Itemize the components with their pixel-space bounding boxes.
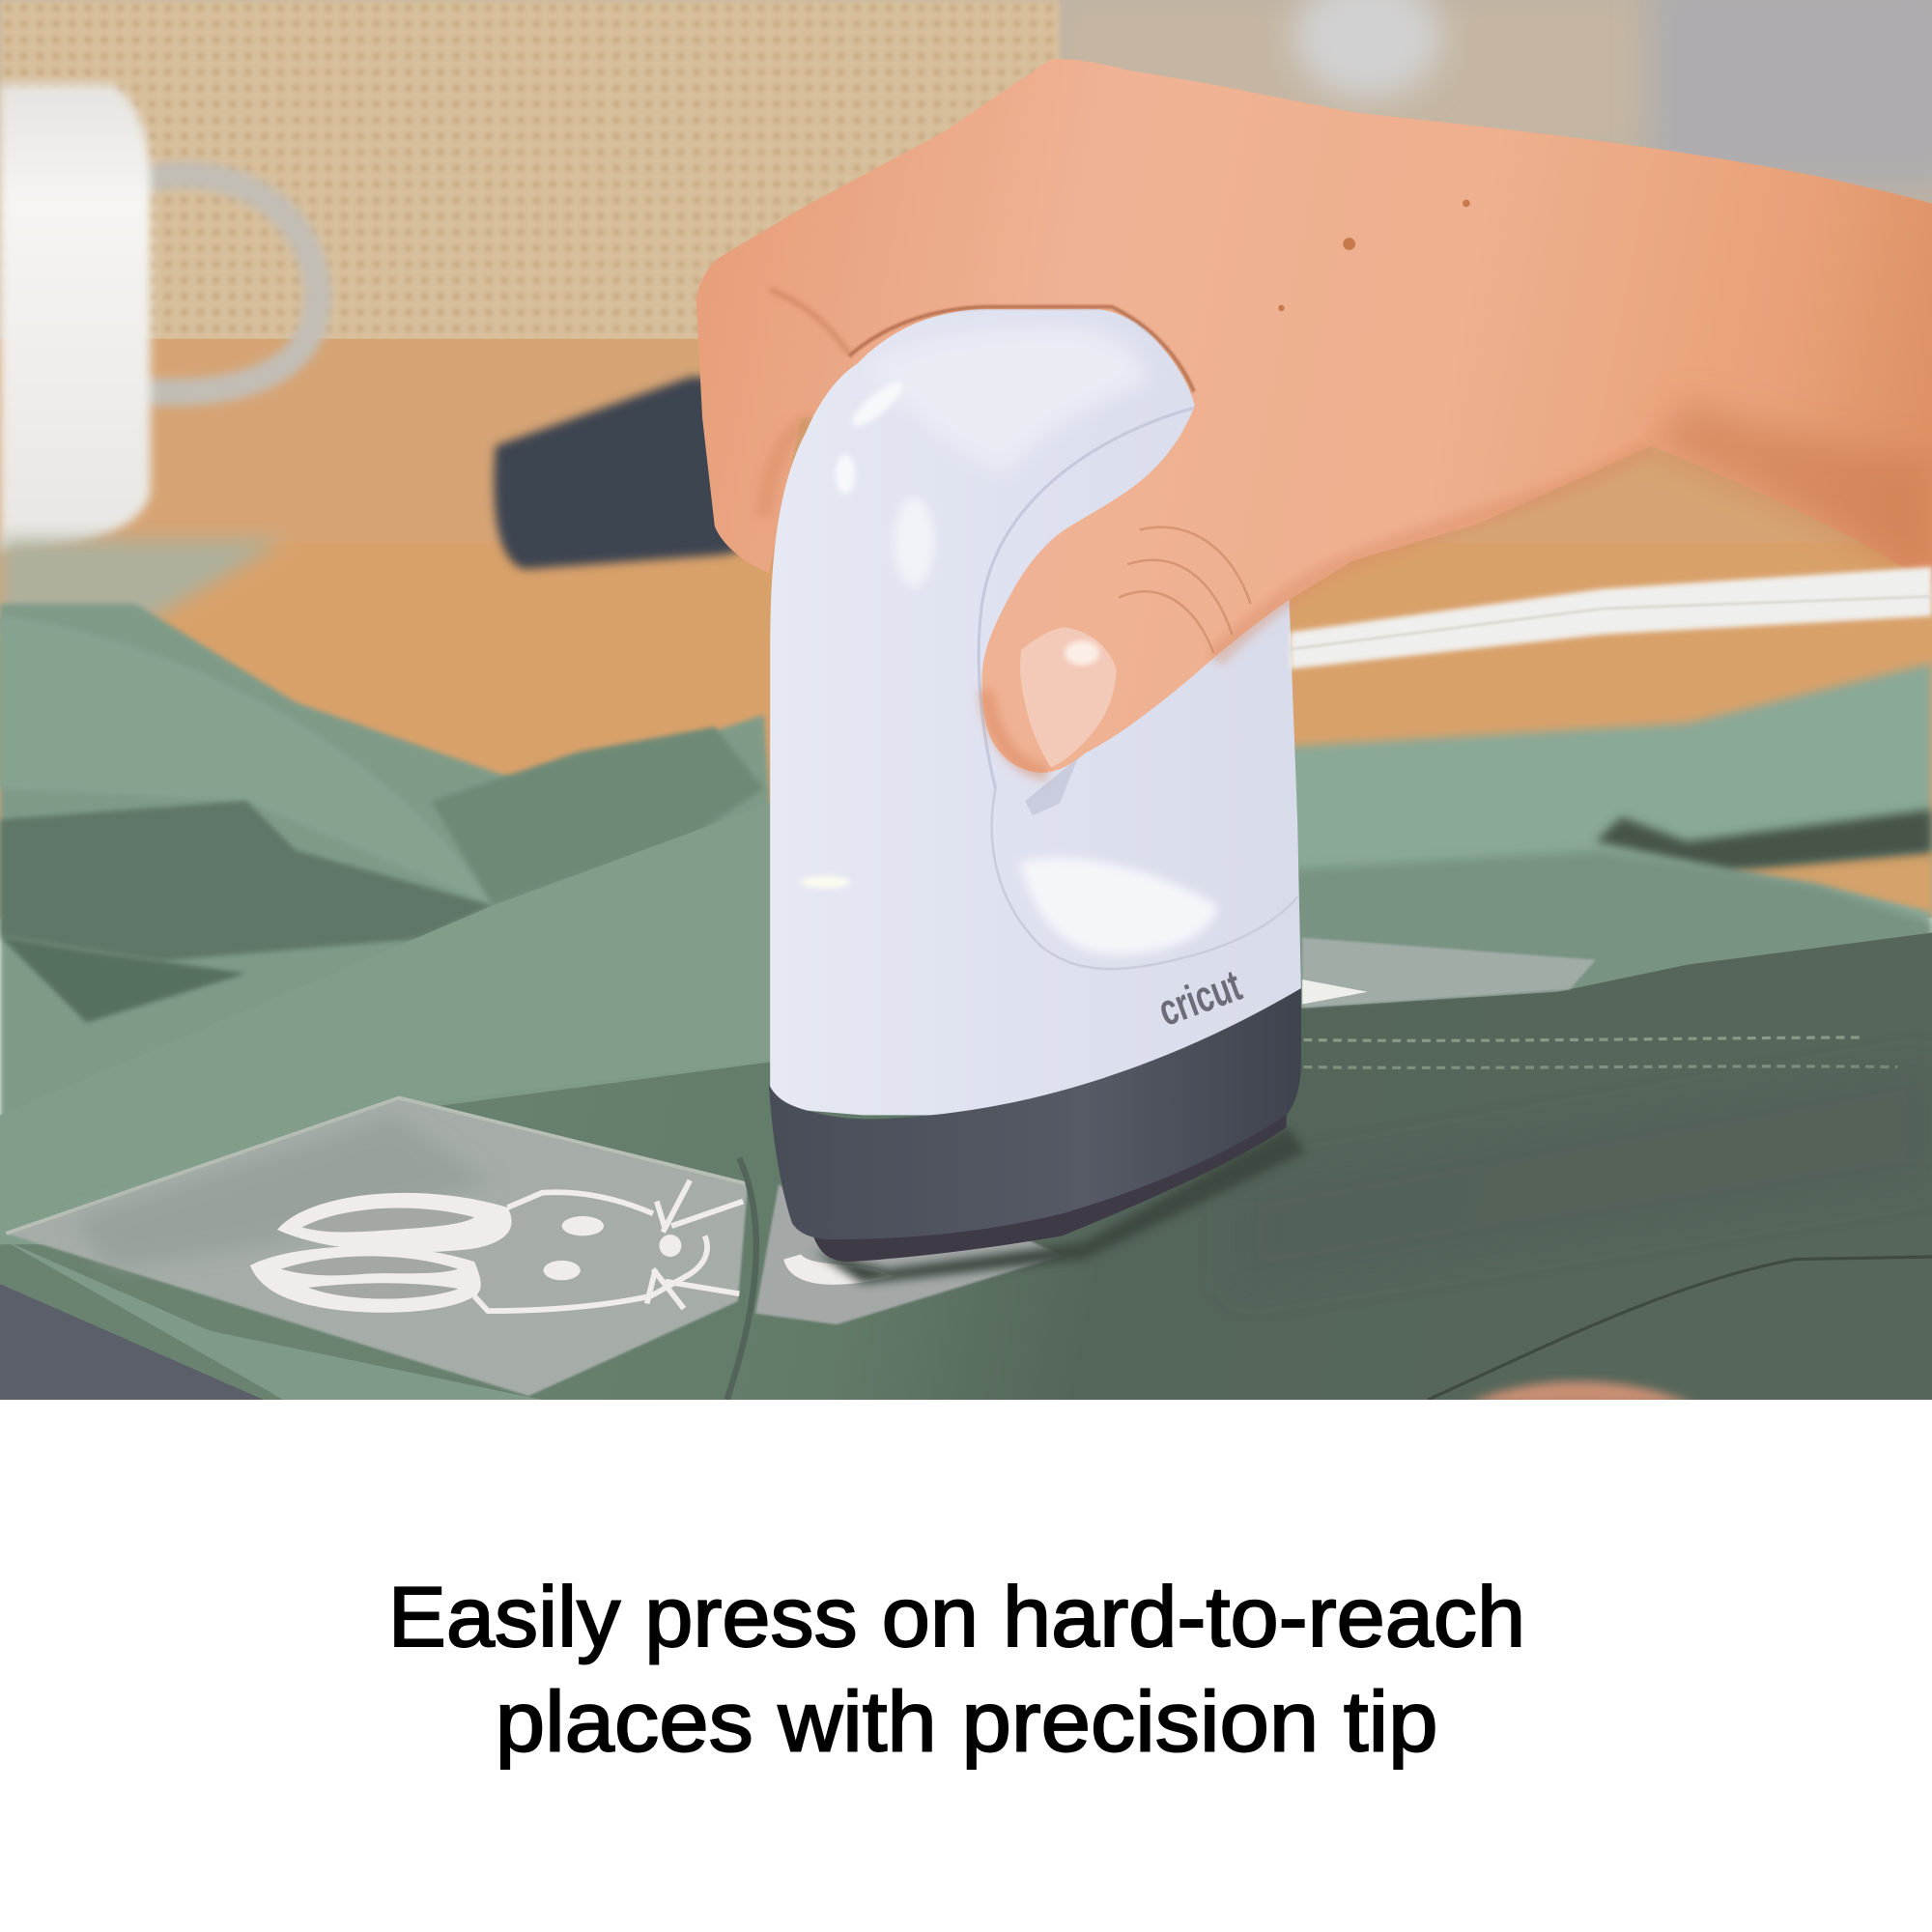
- cricut logo: cricut: [1151, 959, 1248, 1036]
- lower right green: [1298, 849, 1932, 1009]
- skin freckles: [1278, 200, 1470, 311]
- table mat: [0, 540, 286, 629]
- mouse head outline and whiskers: [474, 1180, 743, 1311]
- dark blurred object on table: [494, 377, 764, 569]
- device base band: [769, 988, 1301, 1239]
- garment pocket area: [0, 933, 1932, 1400]
- green shirt: sleeve and folds: [0, 604, 1932, 1400]
- fingertip bottom edge: [1466, 1381, 1694, 1405]
- table sliver: [1725, 850, 1932, 912]
- finger creases: [770, 290, 849, 354]
- highlights: [846, 376, 908, 433]
- device body: [770, 309, 1301, 1115]
- grip shadow above device: [849, 307, 1194, 392]
- drawstring: [727, 1158, 756, 1400]
- hem: [0, 1238, 542, 1400]
- dark fold: [1596, 810, 1932, 871]
- grip window lower curve: [992, 788, 1297, 969]
- mouse eyes and nose: [543, 1216, 681, 1280]
- heat press device: [769, 309, 1306, 1284]
- thumb crease texture: [1119, 527, 1251, 653]
- caption: [388, 1569, 1525, 1769]
- hand and forearm (behind device): [696, 59, 1932, 604]
- right shirt mass: [1282, 663, 1932, 949]
- device shadow: [813, 1127, 1306, 1284]
- device sole: [813, 1112, 1287, 1262]
- mug: [0, 84, 318, 552]
- thumbnail: [1020, 627, 1117, 768]
- white power cord: [1290, 567, 1932, 669]
- caption line 2: places with precision tip: [496, 1673, 1438, 1769]
- background: blurred room: [0, 0, 1932, 918]
- top highlight: [868, 327, 1146, 474]
- second design fragment: [783, 1254, 894, 1285]
- handle inner seam: [979, 408, 1194, 788]
- transfer sheet with white mouse design: [6, 1097, 1062, 1400]
- photo: hand pressing with mini heat press: [0, 0, 1932, 1405]
- thumb and palm (in front of device): [849, 200, 1651, 773]
- caption line 1: Easily press on hard-to-reach: [388, 1569, 1525, 1664]
- left shirt mass: [0, 601, 771, 1244]
- grip window inner surface: [1020, 858, 1217, 954]
- mouse ears: [250, 1193, 512, 1313]
